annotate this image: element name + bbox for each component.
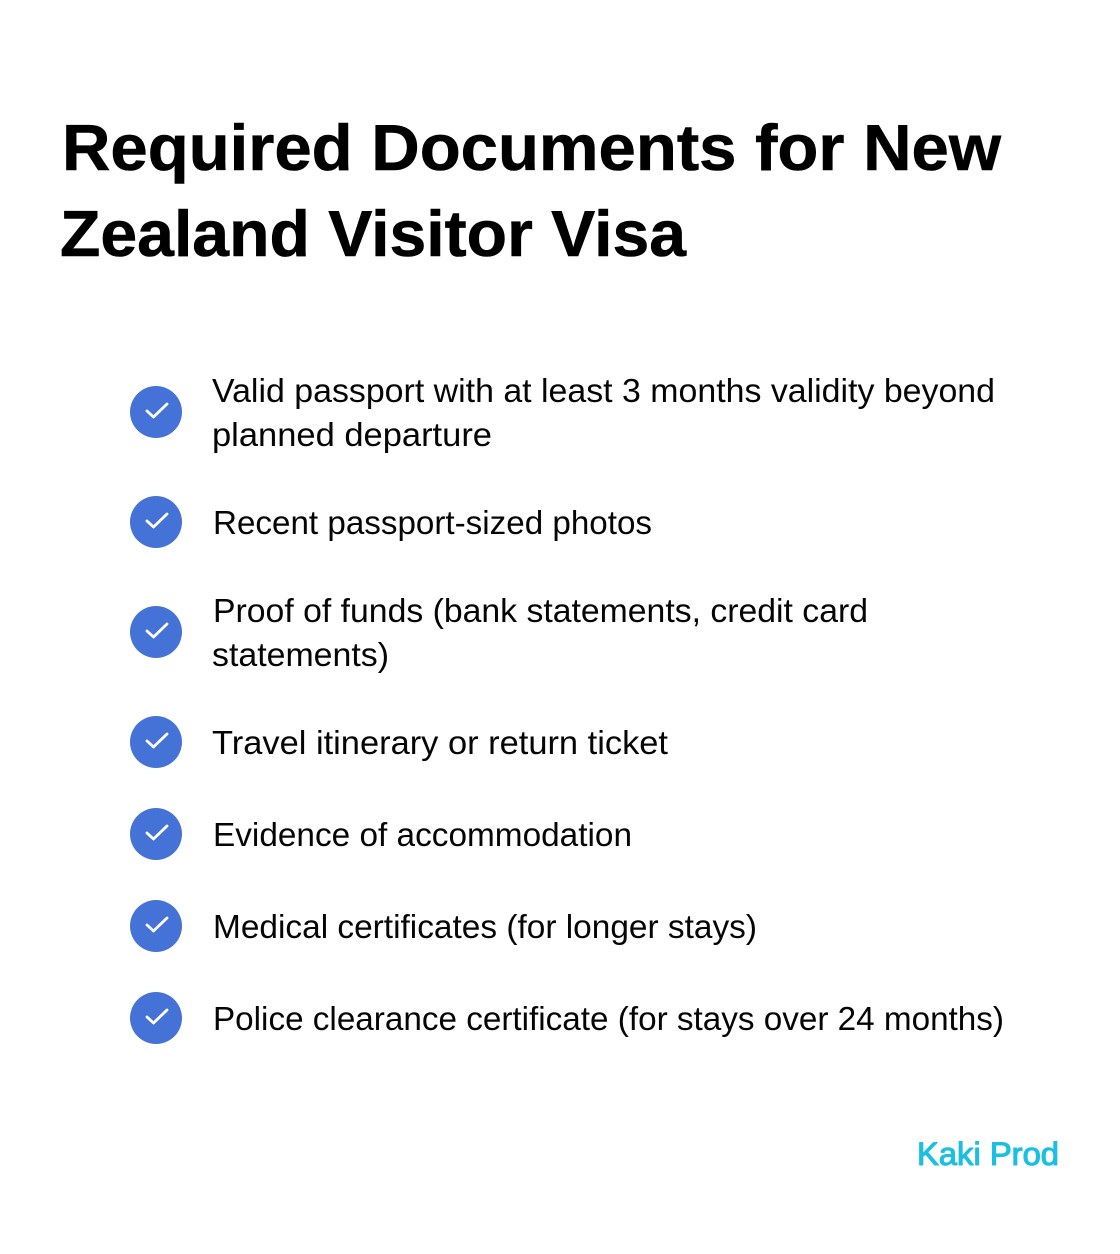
item: police clearance: Police clearance certificate (for stays over 24 months) (213, 1000, 1004, 1037)
item: medical certificates (130, 900, 757, 952)
item: photos: Recent passport-sized photos (213, 504, 652, 541)
title: Zealand Visitor Visa (60, 197, 687, 270)
item: travel itinerary: Travel itinerary or return ticket (212, 724, 668, 761)
item: travel itinerary (130, 716, 668, 768)
title: Required Documents for New (62, 111, 1001, 184)
item: police clearance (130, 992, 1004, 1044)
item: medical certificates: Medical certificates (for longer stays) (213, 908, 757, 945)
logo: Kaki Prod: Kaki Prod (917, 1136, 1059, 1172)
item: valid passport: Valid passport with at least 3 months validity beyond (212, 372, 995, 409)
item: proof of funds: Proof of funds (bank statements, credit card (213, 592, 868, 629)
item: accommodation (130, 808, 632, 860)
item: proof of funds (130, 592, 868, 673)
item: photos (130, 496, 652, 548)
item: valid passport: planned departure (212, 416, 492, 453)
checklist (130, 372, 1004, 1044)
item: proof of funds: statements) (212, 636, 389, 673)
title (60, 111, 1001, 270)
item: valid passport (130, 372, 995, 453)
item: accommodation: Evidence of accommodation (213, 816, 632, 853)
